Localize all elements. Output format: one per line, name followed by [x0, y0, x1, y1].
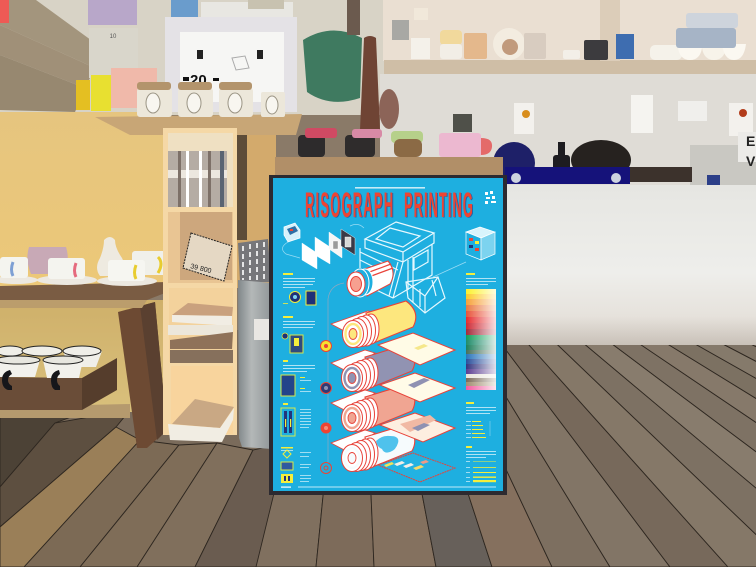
right column: process table — [466, 421, 490, 438]
shelf divider — [600, 0, 620, 61]
galvanized bucket — [238, 280, 272, 449]
title: RISOGRAPH — [306, 186, 394, 226]
right column: weight bars — [466, 461, 496, 482]
white tablecloth — [507, 185, 756, 345]
yellow drum — [342, 301, 416, 348]
right column: paper text — [466, 402, 496, 414]
logo mark — [485, 191, 496, 204]
left side text five — [300, 452, 311, 482]
left column: text block five — [281, 447, 293, 451]
outline ink disc — [320, 462, 332, 474]
yellow ink disc — [320, 340, 332, 352]
subtitle line — [355, 187, 425, 189]
table top — [0, 282, 167, 308]
upper shelf interior — [383, 0, 756, 61]
separated print layers — [302, 229, 355, 269]
risograph machine line drawing — [360, 222, 445, 313]
vase and bowl on table — [27, 237, 124, 276]
plates, bottle and glassware: V — [746, 153, 756, 169]
red ink disc — [320, 422, 332, 434]
enamel mugs — [0, 346, 102, 390]
title: PRINTING — [405, 186, 474, 226]
blue drum ink blob — [376, 436, 398, 453]
right column: colours text — [466, 273, 496, 285]
shopping bag display — [165, 17, 297, 112]
canister shelf — [95, 114, 302, 135]
left icons: drum and cartridge — [283, 291, 316, 305]
printer drum — [347, 261, 393, 297]
table leg — [118, 302, 167, 448]
storage crate — [0, 358, 117, 410]
title: RISOGRAPH — [305, 185, 393, 225]
left icons: small set — [281, 450, 293, 483]
printer paper tray — [406, 277, 445, 313]
layer sheet prints — [400, 344, 436, 432]
green bag and brown post — [303, 0, 399, 130]
poster frame — [269, 175, 507, 495]
poster: blue sheet — [273, 178, 503, 491]
shelf ceramics — [392, 8, 746, 60]
cups on crate — [298, 128, 492, 157]
final print sheet — [378, 453, 455, 482]
bottom shelf — [0, 404, 130, 418]
wood behind bucket — [236, 128, 276, 288]
patterned paper roll — [238, 239, 271, 282]
title: PRINTING — [404, 185, 473, 225]
connector lines — [282, 224, 466, 468]
right column: weight text — [466, 446, 496, 458]
drum sheets — [331, 311, 377, 452]
left column: text block three — [283, 360, 315, 372]
framed board and price sign — [180, 212, 232, 281]
paper cube icon — [466, 227, 495, 260]
plates, bottle and glassware — [493, 132, 756, 185]
shelf plank — [384, 60, 756, 74]
stacked boxes — [0, 0, 95, 112]
left side text four — [300, 409, 311, 428]
left column: text block one — [283, 273, 315, 288]
ink colour palette chart — [466, 289, 496, 390]
red drum — [342, 385, 415, 432]
small screen icon — [284, 223, 300, 242]
large wood panel — [0, 112, 165, 287]
hanging wall tags — [453, 95, 753, 136]
magazines on top shelf — [168, 151, 227, 207]
back wall right — [380, 74, 756, 186]
wall art and calendar — [88, 0, 293, 78]
table mugs and saucers — [0, 251, 167, 286]
poster footer line — [281, 486, 496, 488]
ink cartridge discs — [320, 340, 332, 474]
left column: text block two — [283, 316, 315, 328]
left column: text block four — [283, 403, 288, 405]
navy layer sheet — [380, 373, 455, 402]
blue drum — [342, 425, 415, 472]
left icons: screen — [281, 375, 295, 396]
framed board and price sign: 39 800 — [190, 263, 212, 275]
wood plank floor — [0, 153, 756, 567]
red layer sheet — [380, 413, 455, 442]
stacked notebooks — [168, 303, 233, 363]
navy drum — [342, 345, 415, 392]
yellow layer sheet — [378, 333, 455, 365]
left icons: master unit — [282, 333, 303, 353]
back wall left — [0, 0, 385, 115]
title — [305, 185, 474, 226]
shopping bag display: 20 — [190, 72, 207, 89]
bookshelf — [163, 128, 237, 435]
wood crate behind poster — [275, 157, 503, 177]
left side labels three — [300, 377, 311, 392]
navy ink disc — [320, 382, 332, 394]
bucket label — [254, 319, 270, 340]
yellow deer and notebooks — [76, 68, 157, 111]
wall art and calendar: 10 — [110, 34, 117, 40]
plates, bottle and glassware: E — [746, 133, 755, 149]
ceramic canisters — [137, 82, 285, 117]
table shelf backdrop — [0, 300, 165, 412]
paper notebooks bottom — [168, 399, 234, 442]
left icons: twin columns — [281, 408, 295, 436]
